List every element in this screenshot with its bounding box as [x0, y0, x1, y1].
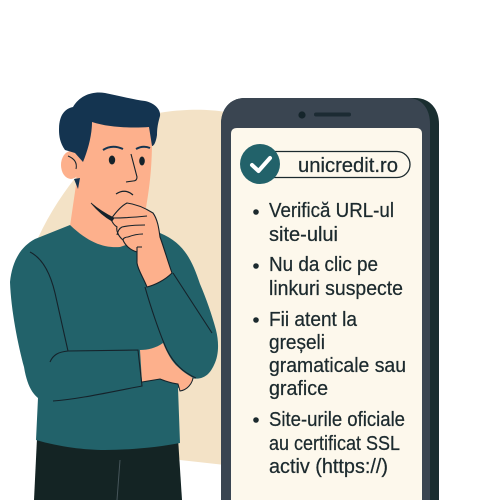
phone speaker	[314, 112, 351, 116]
bullet 3 line 2: greșeli	[269, 331, 325, 354]
ear	[61, 151, 81, 179]
finger lines	[113, 216, 147, 252]
upper hand	[111, 203, 172, 287]
bullet 2 line 1: Nu da clic pe	[269, 253, 378, 276]
phone screen	[231, 128, 422, 500]
right eye	[139, 156, 145, 166]
bullet 4 line 1: Site-urile oficiale	[269, 408, 405, 431]
phone	[221, 98, 439, 500]
bullet 2 line 2: linkuri suspecte	[269, 277, 403, 300]
lower hand outline	[142, 378, 193, 391]
bullet 3 line 1: Fii atent la	[269, 308, 358, 331]
phone body dark edge	[221, 98, 439, 500]
thinking man	[10, 93, 218, 500]
phone camera	[298, 111, 306, 119]
bullet 4 line 3: activ (https://)	[269, 455, 388, 478]
check mark	[252, 158, 270, 171]
URL text: unicredit.ro	[298, 154, 398, 177]
left eyebrow	[103, 147, 123, 150]
left eye	[109, 156, 115, 164]
URL pill	[246, 152, 410, 178]
ear detail	[68, 156, 76, 169]
bullet 3 dot	[253, 317, 259, 323]
phone body front	[221, 98, 430, 500]
bullet 3 line 4: grafice	[269, 377, 328, 400]
badge circle	[240, 144, 280, 184]
bullet list	[253, 199, 406, 478]
sleeve and arm lines	[30, 252, 212, 401]
trouser crease	[117, 460, 120, 500]
hair	[59, 93, 160, 162]
bullet 1 dot	[253, 209, 259, 215]
right eyebrow	[136, 147, 150, 149]
beige background blob	[38, 110, 225, 465]
bullet 1 line 1: Verifică URL-ul	[269, 199, 394, 222]
bullet 3 line 3: gramaticale sau	[269, 354, 406, 377]
bullet 2 dot	[253, 263, 259, 269]
bullet 4 dot	[253, 417, 259, 423]
bullet 4 line 2: au certificat SSL	[269, 432, 400, 455]
mouth	[116, 191, 133, 195]
bullet 1 line 2: site-ului	[269, 223, 338, 246]
trousers	[34, 438, 182, 500]
lower hand	[140, 343, 193, 391]
sweater	[10, 225, 218, 450]
nose	[126, 154, 137, 182]
jaw shadow	[91, 203, 114, 221]
URL bar	[240, 144, 410, 184]
neck and face	[70, 120, 152, 250]
check badge	[240, 144, 280, 184]
hair below ear	[74, 178, 80, 189]
